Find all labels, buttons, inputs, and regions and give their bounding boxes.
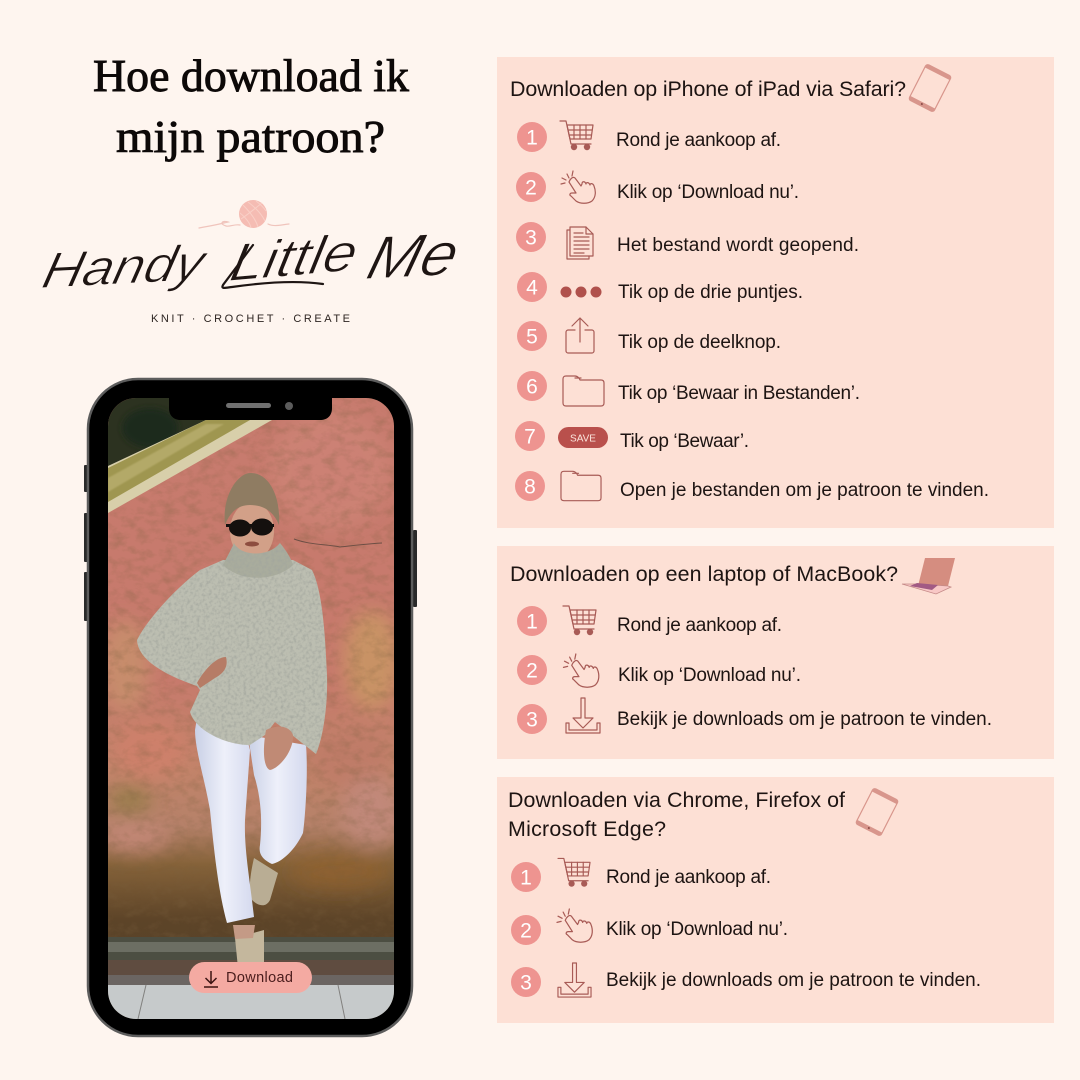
step 3 bbox=[511, 963, 981, 997]
step 6: Tik op ‘Bewaar in Bestanden’. bbox=[618, 383, 860, 404]
step 3: Bekijk je downloads om je patroon te vinden. bbox=[617, 709, 992, 730]
step 1 bbox=[517, 606, 782, 636]
step 1: Rond je aankoop af. bbox=[616, 130, 781, 151]
step 3: Bekijk je downloads om je patroon te vinden. bbox=[606, 970, 981, 991]
hand on thigh bbox=[264, 727, 293, 770]
step 8 bbox=[515, 471, 989, 501]
step 1: 1 bbox=[526, 610, 538, 634]
heading bbox=[508, 788, 845, 841]
sunglasses bbox=[226, 518, 274, 536]
title: Hoe download ik bbox=[93, 50, 409, 101]
heading: Downloaden op een laptop of MacBook? bbox=[510, 562, 898, 586]
step 2 bbox=[516, 171, 799, 203]
step 3 bbox=[517, 698, 992, 734]
step 2: Klik op ‘Download nu’. bbox=[618, 665, 801, 686]
logo script text: Me bbox=[360, 220, 466, 293]
step 5: 5 bbox=[526, 326, 538, 348]
wall texture bbox=[108, 398, 394, 938]
step 7: SAVE bbox=[570, 434, 596, 444]
camera bbox=[285, 402, 293, 410]
title: mijn patroon? bbox=[116, 111, 385, 162]
heading: Downloaden via Chrome, Firefox of bbox=[508, 788, 845, 812]
logo: Handy Little Me bbox=[37, 200, 466, 325]
wall crack bbox=[294, 539, 382, 547]
step 3: 3 bbox=[520, 972, 532, 994]
step 5: Tik op de deelknop. bbox=[618, 332, 781, 353]
panel: laptop of MacBook bbox=[497, 546, 1054, 759]
hair bbox=[225, 473, 279, 525]
step 2: Klik op ‘Download nu’. bbox=[606, 919, 788, 940]
photo: woman in knitted sweater bbox=[99, 398, 402, 1019]
logo tagline: KNIT · CROCHET · CREATE bbox=[151, 313, 350, 325]
dark foliage bbox=[108, 398, 206, 466]
step 8: Open je bestanden om je patroon te vinden. bbox=[620, 480, 989, 501]
icon: laptop bbox=[902, 558, 955, 594]
step 7: Tik op ‘Bewaar’. bbox=[620, 431, 749, 452]
step 2: Klik op ‘Download nu’. bbox=[617, 182, 799, 203]
phone body bbox=[88, 379, 412, 1036]
logo script text: Handy bbox=[37, 234, 214, 299]
title bbox=[93, 50, 409, 162]
step 1: 1 bbox=[526, 126, 538, 150]
panel: Chrome, Firefox of Microsoft Edge bbox=[497, 777, 1054, 1023]
icon: phone bbox=[908, 64, 952, 112]
step 5 bbox=[517, 318, 781, 353]
lips bbox=[245, 542, 259, 546]
back boot bbox=[250, 858, 278, 905]
step 2: 2 bbox=[525, 176, 537, 200]
step 4: Tik op de drie puntjes. bbox=[618, 282, 803, 303]
step 2 bbox=[511, 909, 788, 945]
heading: Microsoft Edge? bbox=[508, 817, 666, 841]
sweater bbox=[137, 543, 327, 754]
ground bbox=[108, 937, 394, 960]
download button bbox=[189, 962, 312, 993]
trousers bbox=[195, 712, 254, 923]
logo script text: Little bbox=[226, 223, 363, 293]
icon: yarn ball bbox=[199, 200, 289, 228]
panel background bbox=[497, 57, 1054, 528]
download button: Download bbox=[226, 970, 293, 986]
step 3 bbox=[516, 222, 859, 259]
step 1: Rond je aankoop af. bbox=[617, 615, 782, 636]
step 8: 8 bbox=[524, 476, 536, 498]
icon: phone bbox=[855, 788, 899, 836]
step 7: 7 bbox=[524, 426, 536, 448]
phone mockup bbox=[84, 379, 417, 1036]
panel background bbox=[497, 546, 1054, 759]
heading: Downloaden op iPhone of iPad via Safari? bbox=[510, 77, 906, 101]
face bbox=[230, 505, 274, 554]
hand on hip bbox=[197, 657, 227, 688]
step 1 bbox=[511, 858, 771, 892]
notch bbox=[169, 398, 332, 420]
step 3: 3 bbox=[526, 708, 538, 732]
step 3: Het bestand wordt geopend. bbox=[617, 235, 859, 256]
step 2: 2 bbox=[526, 660, 538, 682]
step 7 bbox=[515, 421, 749, 452]
step 4: 4 bbox=[526, 276, 538, 300]
step 4 bbox=[517, 272, 803, 303]
step 2: 2 bbox=[520, 920, 532, 942]
step 3: 3 bbox=[525, 226, 537, 250]
step 2 bbox=[517, 654, 801, 687]
panel: iPhone of iPad bbox=[497, 57, 1054, 528]
speaker bbox=[226, 403, 271, 408]
front boot bbox=[235, 930, 264, 962]
phone side buttons bbox=[84, 465, 417, 621]
step 6: 6 bbox=[526, 376, 538, 398]
stone ledge bbox=[108, 420, 272, 513]
step 1 bbox=[517, 121, 781, 152]
panel background bbox=[497, 777, 1054, 1023]
logo script text bbox=[37, 220, 466, 299]
step 1: 1 bbox=[520, 866, 532, 890]
step 6 bbox=[517, 371, 860, 406]
step 1: Rond je aankoop af. bbox=[606, 867, 771, 888]
